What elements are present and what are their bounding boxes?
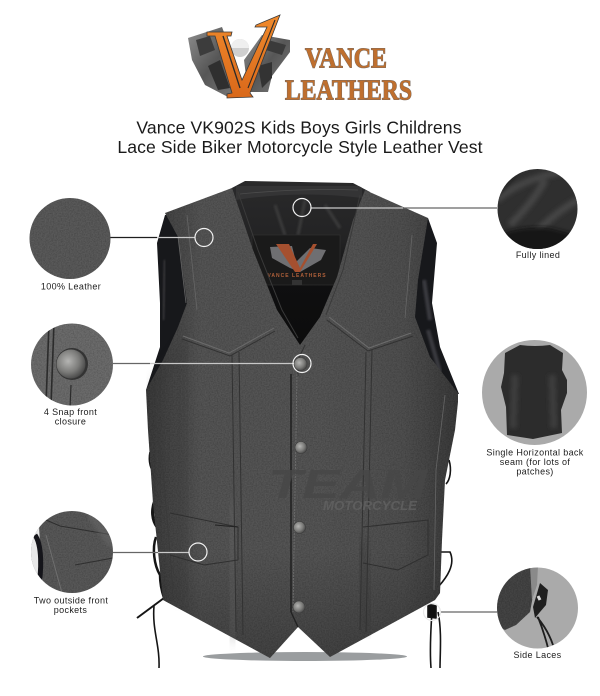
label: Fully lined: [516, 250, 560, 260]
vest: [137, 178, 459, 668]
logo: Vance Leathers: [188, 15, 412, 106]
left side laces: [137, 452, 164, 668]
label: 100% Leather: [41, 282, 101, 292]
vest body: [146, 188, 458, 658]
leader line: 100% leather: [110, 228, 213, 246]
vest seams: [152, 192, 445, 635]
snap buttons: [293, 358, 307, 613]
vest hem shading: [146, 390, 458, 658]
title: Vance VK902S Kids Boys Girls Childrens: [136, 118, 462, 138]
callout: fully lined: [495, 167, 580, 260]
label: 4 Snap front: [44, 407, 97, 417]
neck label: VANCE LEATHERS: [267, 273, 327, 279]
right pocket: [363, 520, 428, 570]
label: [486, 448, 584, 476]
inner lining at armholes: [146, 215, 190, 390]
leader line: pockets: [113, 543, 207, 561]
callout: side laces: [495, 566, 580, 660]
label: [44, 407, 97, 426]
leader line: fully lined: [293, 198, 497, 216]
label: seam (for lots of: [500, 457, 570, 467]
watermark: Team Motorcycle: [268, 461, 428, 513]
label: Two outside front: [34, 596, 108, 606]
label: Side Laces: [513, 650, 562, 660]
vest shading: [150, 345, 370, 640]
icon: pocket closeup: [30, 510, 115, 595]
right side laces: [428, 460, 452, 668]
leader line: snap closure: [113, 354, 311, 372]
logo wordmark: LEATHERS: [285, 76, 412, 106]
callout: snap closure: [30, 322, 114, 426]
logo wordmark: VANCE: [305, 42, 387, 74]
watermark: Team Motorcycle: MOTORCYCLE: [323, 498, 417, 513]
neck label: [252, 235, 340, 285]
icon: leather texture: [30, 198, 110, 279]
logo wordmark: [285, 42, 412, 106]
label: [34, 596, 108, 615]
leader line: side laces: [424, 604, 497, 620]
title: [117, 118, 483, 157]
title: Lace Side Biker Motorcycle Style Leather Vest: [117, 137, 483, 157]
label: closure: [55, 416, 86, 426]
callout: 100% leather: [30, 198, 110, 292]
callout: pockets: [30, 510, 115, 615]
icon: orange V: [207, 15, 280, 98]
icon: engine: [188, 27, 290, 97]
label: Single Horizontal back: [486, 448, 584, 458]
left pocket: [170, 513, 238, 565]
label: pockets: [54, 605, 87, 615]
watermark: Team Motorcycle: TEAM: [268, 461, 428, 507]
label: patches): [516, 466, 554, 476]
icon: snap closeup: [30, 322, 114, 408]
icon: lace closeup: [497, 568, 578, 648]
icon: lining closeup: [498, 169, 578, 249]
ground shadow: [203, 652, 407, 661]
icon: back of vest: [482, 340, 587, 445]
neck interior lining: [230, 181, 370, 345]
callout: back seam: [482, 340, 587, 476]
